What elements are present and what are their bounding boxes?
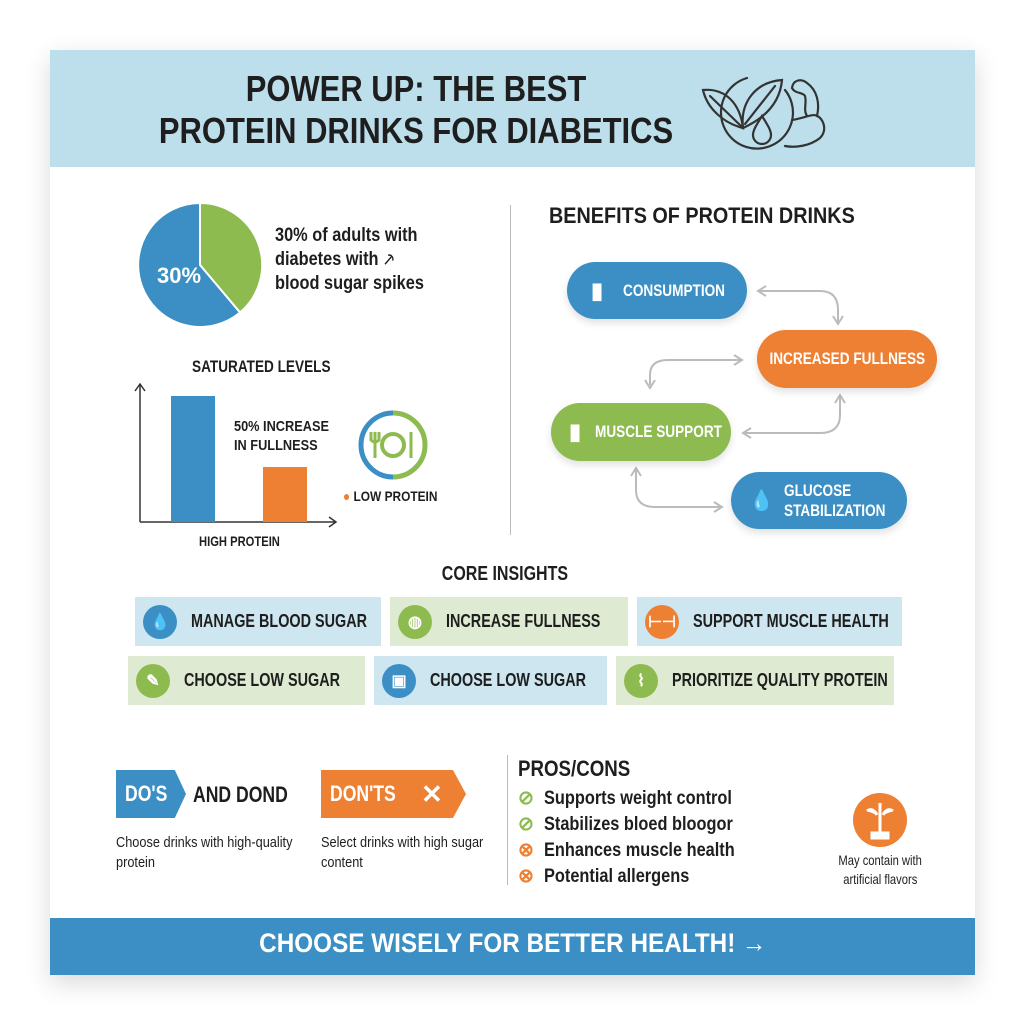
caption	[838, 852, 922, 887]
insight: choose low sugar 1	[128, 656, 365, 705]
pill: glucose stabilization: 💧	[749, 490, 774, 512]
footer text: CHOOSE WISELY FOR BETTER HEALTH! →	[259, 928, 766, 958]
bar chart	[134, 382, 338, 528]
pros/cons: ⊗	[518, 866, 534, 887]
insight: prioritize quality protein: ⌇	[637, 672, 645, 690]
pill: consumption	[567, 262, 747, 319]
do's text: protein	[116, 854, 155, 871]
caption: artificial flavors	[843, 871, 917, 887]
legend: low protein: ● LOW PROTEIN	[343, 488, 437, 504]
icon: leaf, drop and muscle	[702, 76, 826, 150]
divider	[507, 755, 508, 885]
pill: glucose stabilization: STABILIZATION	[784, 500, 885, 520]
pill: glucose stabilization	[731, 472, 907, 529]
bar annotation: IN FULLNESS	[234, 437, 318, 454]
don'ts text: Select drinks with high sugar	[321, 834, 483, 851]
footer band	[50, 918, 975, 975]
title: PROTEIN DRINKS FOR DIABETICS	[159, 110, 673, 151]
insight: manage blood sugar: 💧	[150, 614, 170, 630]
pie chart	[139, 204, 262, 326]
title	[159, 68, 673, 151]
don'ts tag	[321, 770, 466, 818]
insight: choose low sugar 2: ▣	[391, 672, 407, 690]
do's text	[116, 834, 292, 871]
insight: increase fullness: INCREASE FULLNESS	[446, 611, 600, 631]
don'ts tag: ✕	[421, 779, 443, 809]
insight: increase fullness: ◍	[408, 614, 422, 630]
pill: muscle support: MUSCLE SUPPORT	[595, 422, 722, 441]
pie caption	[275, 225, 424, 294]
pros/cons: ⊘	[518, 814, 534, 835]
insight: prioritize quality protein: PRIORITIZE QUALITY PROTEIN	[672, 670, 888, 690]
pill: muscle support	[551, 403, 731, 461]
bar annotation: 50% INCREASE	[234, 418, 329, 435]
header band	[50, 50, 975, 167]
do's heading: AND DOND	[193, 782, 288, 807]
insight: choose low sugar 2	[374, 656, 607, 705]
insight: manage blood sugar	[135, 597, 381, 646]
pie caption: blood sugar spikes	[275, 273, 424, 294]
pie chart: 30%	[157, 263, 201, 288]
don'ts text: content	[321, 854, 363, 871]
pros/cons: Supports weight control	[544, 788, 732, 809]
pill: consumption: ▮	[591, 278, 603, 302]
divider	[510, 205, 511, 535]
pros/cons: PROS/CONS	[518, 756, 630, 781]
arrows	[630, 285, 846, 513]
pie caption: diabetes with ⸕	[275, 249, 395, 270]
x label: HIGH PROTEIN	[199, 533, 280, 549]
core insights heading: CORE INSIGHTS	[442, 563, 568, 585]
insight: increase fullness	[390, 597, 628, 646]
pros/cons: Stabilizes bloed bloogor	[544, 814, 733, 835]
insight: choose low sugar 2: CHOOSE LOW SUGAR	[430, 670, 586, 690]
pie caption: 30% of adults with	[275, 225, 418, 246]
insight: support muscle health: ⊢⊣	[648, 614, 676, 630]
do's tag: DO'S	[125, 781, 167, 806]
insight: choose low sugar 1: ✎	[146, 672, 160, 690]
pros/cons: ⊗	[518, 840, 534, 861]
insight: prioritize quality protein	[616, 656, 894, 705]
pill: increased fullness	[757, 330, 937, 388]
icon: orange badge	[853, 793, 907, 847]
pros/cons: Enhances muscle health	[544, 840, 735, 861]
insight: manage blood sugar: MANAGE BLOOD SUGAR	[191, 611, 367, 631]
pill: consumption: CONSUMPTION	[623, 280, 725, 300]
icon: plate	[358, 410, 428, 480]
insight: support muscle health: SUPPORT MUSCLE HEALTH	[693, 611, 889, 631]
pill: glucose stabilization: GLUCOSE	[784, 480, 851, 500]
do's text: Choose drinks with high-quality	[116, 834, 292, 851]
pros/cons	[518, 756, 735, 887]
benefits heading: BENEFITS OF PROTEIN DRINKS	[549, 203, 855, 228]
insight: choose low sugar 1: CHOOSE LOW SUGAR	[184, 670, 340, 690]
bar annotation	[234, 418, 329, 454]
do's tag	[116, 770, 186, 818]
caption: May contain with	[838, 852, 922, 868]
don'ts text	[321, 834, 484, 871]
pill: muscle support: ▮	[569, 419, 581, 444]
insight: support muscle health	[637, 597, 902, 646]
pill: increased fullness: INCREASED FULLNESS	[769, 349, 925, 368]
pros/cons: Potential allergens	[544, 866, 689, 887]
pros/cons: ⊘	[518, 788, 534, 809]
bar chart title: SATURATED LEVELS	[192, 357, 331, 376]
title: POWER UP: THE BEST	[246, 68, 586, 109]
don'ts tag: DON'TS	[330, 781, 396, 806]
